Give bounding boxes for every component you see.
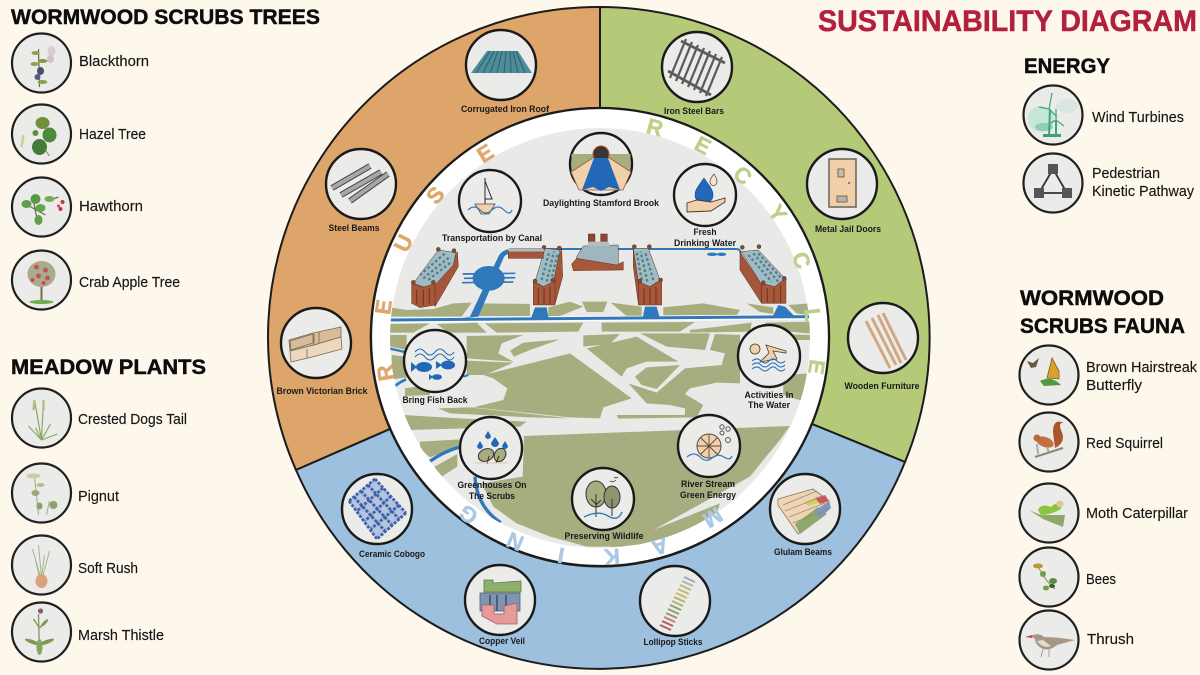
panel: inner ring (371, 108, 829, 566)
icon: butterfly (1027, 358, 1061, 386)
ring label: recycle: E (690, 131, 715, 160)
item: ceramic cobogo (342, 474, 425, 560)
label: Copper Veil (479, 636, 525, 647)
label: Marsh Thistle (78, 627, 164, 644)
label: Soft Rush (78, 560, 138, 577)
item: iron steel bars (662, 32, 732, 117)
item: pignut (12, 464, 120, 522)
ring label: recycle: R (644, 113, 666, 142)
icon: bees and flowers (1033, 564, 1057, 590)
item: marsh thistle (12, 602, 164, 662)
icon: iron bars (668, 39, 725, 96)
label: Crested Dogs Tail (78, 411, 187, 428)
label: Crab Apple Tree (79, 274, 180, 291)
item: activities in the water (738, 325, 800, 411)
ring label: making (454, 499, 727, 569)
item: wooden furniture (844, 303, 920, 392)
icon: hawthorn branch (22, 194, 64, 225)
label: Drinking Water (674, 238, 736, 249)
label: Red Squirrel (1086, 435, 1163, 452)
label: Bees (1086, 571, 1116, 588)
item: preserving wildlife (564, 468, 644, 542)
ring label: recycle: C (787, 248, 816, 272)
icon: hazel leaves (22, 117, 56, 156)
icon: bricks (289, 327, 342, 362)
icon: fish and waves (411, 349, 455, 380)
icon: copper veil building (480, 580, 521, 624)
icon: water wheel (687, 425, 732, 460)
heading: fauna: SCRUBS FAUNA (1020, 314, 1185, 338)
map: lower streams (388, 348, 501, 523)
item: copper veil (465, 565, 535, 647)
item: corrugated iron roof (461, 30, 550, 115)
label: Corrugated Iron Roof (461, 104, 550, 115)
label: Lollipop Sticks (644, 637, 702, 648)
icon: squirrel (1034, 422, 1064, 457)
label: The Water (748, 400, 790, 411)
icon: soft rush (32, 545, 50, 588)
icon: rain on leaves (474, 431, 508, 464)
label (1092, 165, 1194, 200)
ring label: recycle: L (799, 307, 826, 323)
ring label: reuse: R (372, 363, 399, 383)
item: hawthorn (12, 178, 143, 236)
ring label: reuse (370, 139, 498, 383)
ring label: making: G (454, 499, 483, 530)
heading: fauna: WORMWOOD (1020, 286, 1164, 310)
label (458, 480, 527, 502)
label: Ceramic Cobogo (359, 549, 425, 560)
label: Brown Hairstreak (1086, 359, 1197, 376)
icon: marsh thistle (24, 608, 55, 655)
label: Bring Fish Back (402, 395, 468, 406)
icon: swimmer (750, 344, 786, 371)
label: Wooden Furniture (844, 381, 920, 392)
heading: trees: WORMWOOD SCRUBS TREES (11, 5, 320, 29)
icon: pignut (26, 474, 58, 515)
heading: meadow plants: MEADOW PLANTS (11, 355, 206, 379)
label: Thrush (1087, 631, 1134, 648)
label: Glulam Beams (774, 547, 832, 558)
panel: outer wheel (268, 7, 930, 669)
icon: wooden planks (866, 313, 906, 368)
heading: fauna (1020, 286, 1185, 338)
icon: sailboat (468, 178, 512, 214)
item: thrush (1020, 610, 1134, 670)
item: transportation by canal (442, 170, 542, 244)
label: Butterfly (1086, 377, 1142, 394)
label: Steel Beams (328, 223, 380, 234)
ring label: making: K (603, 544, 621, 569)
ring label: reuse: U (389, 231, 418, 256)
icon: hand and drop (687, 174, 725, 212)
icon: glulam beams (778, 489, 831, 534)
heading: energy: ENERGY (1024, 54, 1110, 78)
panel: meadow plants (11, 355, 206, 662)
icon: culvert outflow (571, 146, 631, 191)
icon: steel beams (332, 166, 388, 201)
map: canal lines (390, 249, 809, 320)
ring label: recycle: Y (763, 200, 792, 227)
label (744, 390, 794, 411)
item: steel beams (326, 149, 396, 234)
panel: wormwood scrubs trees (11, 5, 320, 310)
label: Activities In (744, 390, 794, 401)
panel: wormwood scrubs fauna (1020, 286, 1197, 670)
label (1086, 359, 1197, 394)
panel: energy (1024, 54, 1194, 212)
label: Green Energy (680, 490, 737, 501)
item: bees (1020, 548, 1116, 606)
ring label: making: I (556, 543, 566, 568)
ring label: making: A (649, 532, 671, 561)
item: daylighting stamford brook (543, 133, 660, 209)
icon: grass (28, 400, 58, 440)
item: soft rush (12, 536, 138, 594)
label: Hazel Tree (79, 126, 146, 143)
item: red squirrel (1020, 412, 1163, 472)
label (674, 227, 736, 249)
icon: corrugated roof (471, 51, 532, 73)
ring label: reuse: E (472, 139, 498, 168)
icon: kinetic triangle (1034, 164, 1072, 198)
label: Preserving Wildlife (564, 531, 644, 542)
item: crested dogs tail (12, 388, 187, 448)
item: glulam beams (770, 474, 840, 558)
panel: site map (388, 128, 810, 548)
item: bring fish back (402, 330, 468, 406)
label: Daylighting Stamford Brook (543, 198, 660, 209)
ring label: making: N (503, 527, 527, 556)
label: Metal Jail Doors (815, 224, 881, 235)
item: pedestrian kinetic pathway (1024, 154, 1194, 212)
label: The Scrubs (469, 491, 515, 502)
item: crab apple tree (12, 250, 180, 310)
label: Pignut (78, 488, 120, 505)
ring label: making: M (698, 502, 727, 533)
item: brown hairstreak butterfly (1020, 346, 1197, 404)
item: lollipop sticks (640, 566, 710, 648)
label: Transportation by Canal (442, 233, 542, 244)
icon: wind turbines (1028, 93, 1078, 137)
item: river stream green energy (678, 415, 740, 501)
label: Fresh (694, 227, 717, 238)
item: blackthorn (12, 34, 149, 92)
label: Iron Steel Bars (664, 106, 724, 117)
label (680, 479, 737, 501)
icon: ceramic lattice (349, 479, 406, 539)
ring label: reuse: E (370, 298, 397, 316)
label: Hawthorn (79, 198, 143, 215)
icon: blackthorn sprig (30, 46, 56, 87)
ring label: recycle: E (803, 358, 830, 376)
item: hazel tree (12, 104, 146, 164)
icon: thrush bird (1025, 634, 1075, 657)
ring label: reuse: S (421, 182, 450, 209)
label: Pedestrian (1092, 165, 1160, 182)
item: metal jail doors (807, 149, 881, 235)
label: Moth Caterpillar (1086, 505, 1188, 522)
icon: lollipop sticks (660, 577, 695, 630)
item: fresh drinking water (674, 164, 736, 249)
map: green patches lower (390, 322, 810, 547)
label: Kinetic Pathway (1092, 183, 1194, 200)
label: River Stream (681, 479, 735, 490)
map: buildings (411, 234, 786, 308)
ring label: recycle: C (728, 161, 757, 190)
item: greenhouses on the scrubs (458, 417, 527, 502)
label: Wind Turbines (1092, 109, 1184, 126)
ring label: recycle (644, 113, 830, 376)
sector: making (blue) (296, 424, 905, 669)
map: green patches upper (390, 302, 809, 317)
sector: recycle (green) (600, 7, 930, 462)
item: brown victorian brick (276, 308, 368, 397)
label: Greenhouses On (458, 480, 527, 491)
sector: reuse (orange) (268, 7, 600, 470)
icon: caterpillar on leaf (1029, 500, 1065, 527)
item: moth caterpillar (1020, 484, 1188, 542)
icon: door (829, 159, 856, 207)
item: wind turbines (1024, 86, 1184, 144)
label: Brown Victorian Brick (276, 386, 368, 397)
icon: trees and birds (584, 477, 622, 518)
label: Blackthorn (79, 53, 149, 70)
icon: crab apple tree (28, 261, 56, 304)
